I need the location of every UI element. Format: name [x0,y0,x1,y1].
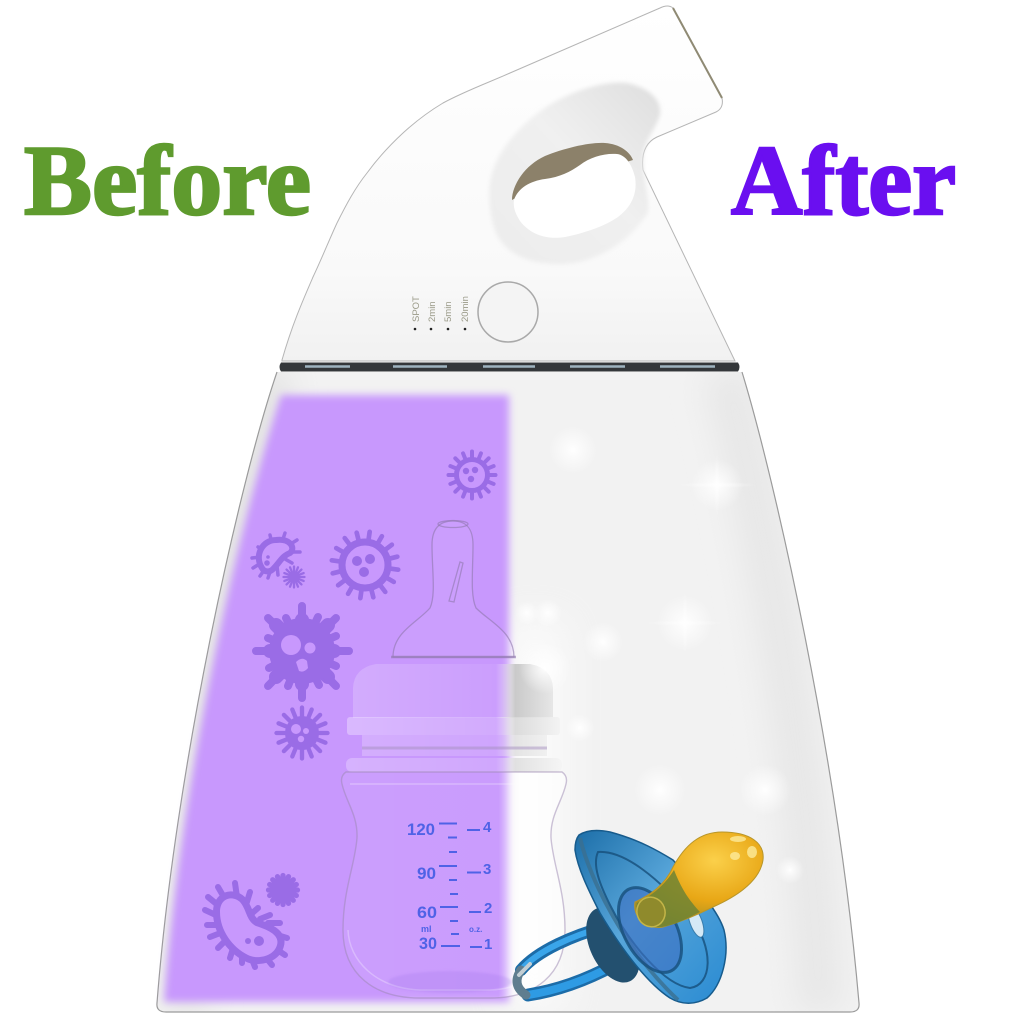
handle opening [514,154,636,238]
heading: Before: Before [24,125,311,236]
pacifier [517,831,763,1003]
timer labels: SPOT [411,296,422,322]
power button [478,282,538,342]
pacifier nipple tip [633,893,669,931]
germ: star bottom [268,876,298,904]
timer labels [411,296,471,322]
measuring scale [407,819,492,953]
handle inner brown edge [512,143,633,200]
measuring scale: 2 [484,900,492,917]
pacifier ring [517,927,614,995]
sparkles: cleaned side [515,426,804,884]
germ icons [205,452,496,967]
measuring scale: 120 [407,820,435,839]
germ: large bean [205,883,287,967]
measuring scale: 4 [483,819,492,836]
pacifier hub [575,899,651,991]
measuring scale: 3 [483,861,491,878]
germ: top right [448,452,496,498]
collar sparkle [519,642,571,694]
bottle nipple [391,520,516,657]
pacifier nipple [635,832,763,927]
timer labels: 2min [427,301,438,322]
cap shell [282,6,735,361]
germ: lower small virus [276,708,328,758]
device cap [282,6,735,361]
pacifier nipple base [636,870,700,927]
bottle base shadow [388,971,512,993]
measuring scale: 30 [419,934,437,953]
bottle collar [353,664,553,718]
bottle rim [347,717,560,735]
measuring scale: 1 [484,936,492,953]
heading: After: After [731,125,956,236]
germ: ringed medium [327,527,403,603]
timer labels: 20min [460,296,471,322]
timer labels: 5min [443,301,454,322]
measuring scale: 90 [417,864,436,883]
pacifier shield rings [580,838,708,1000]
bottle body [342,772,566,998]
measuring scale: o.z. [469,925,482,934]
timer indicator dots [414,328,466,330]
measuring scale: 60 [417,903,437,922]
nozzle end edge [673,8,722,98]
nipple highlights [730,836,757,860]
UV band between cap and chamber [280,362,740,372]
baby bottle [342,520,571,998]
germ: small bean [252,533,304,588]
bottle inner highlight lines [348,784,560,990]
measuring scale: ml [421,924,432,934]
handle recess [489,83,660,264]
purple UV light panel [164,395,509,1002]
bottle neck thread [346,735,562,772]
pacifier shield [575,831,726,1003]
device lower chamber [157,372,859,1012]
germ: large virus [256,606,349,698]
